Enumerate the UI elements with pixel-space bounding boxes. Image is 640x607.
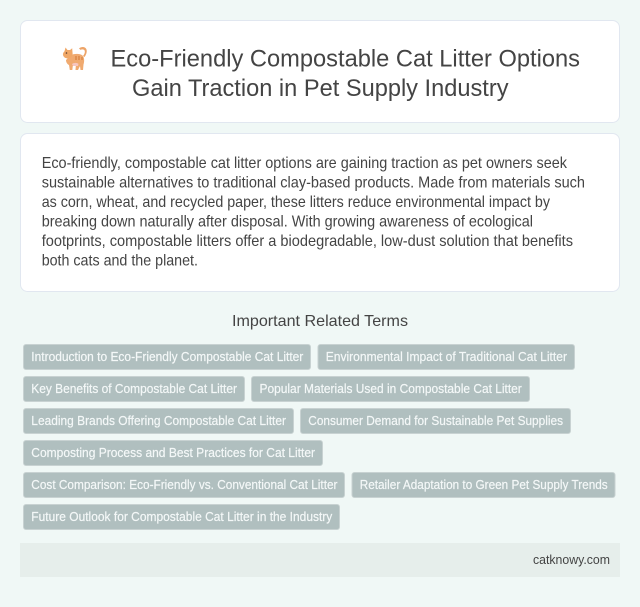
title text: Gain Traction in Pet Supply Industry [132, 75, 509, 102]
tag: future outlook: Future Outlook for Compostable Cat Litter in the Industry [31, 509, 333, 524]
tag: environmental impact [318, 344, 574, 370]
panel: summary paragraph: sustainable alternatives to traditional clay-based products. Made from materials such [42, 174, 585, 192]
tag: retailer adaptation: Retailer Adaptation to Green Pet Supply Trends [360, 477, 608, 492]
panel: summary paragraph [20, 134, 620, 292]
panel: summary paragraph: as corn, wheat, and recycled paper, these litters reduce environmental impact by [42, 194, 550, 211]
tag: introduction: Introduction to Eco-Friendly Compostable Cat Litter [31, 349, 304, 364]
tag: key benefits [24, 376, 244, 402]
tag: consumer demand [300, 408, 570, 434]
icon: cat [63, 47, 87, 70]
title text: Eco-Friendly Compostable Cat Litter Options [110, 46, 580, 72]
tag: popular materials: Popular Materials Used in Compostable Cat Litter [260, 381, 522, 396]
panel: summary paragraph: both cats and the planet. [42, 252, 198, 270]
tag: leading brands [24, 408, 294, 434]
tag: composting process: Composting Process and Best Practices for Cat Litter [31, 445, 316, 460]
tag: popular materials [252, 376, 530, 402]
tag: environmental impact: Environmental Impact of Traditional Cat Litter [326, 349, 568, 364]
tag: introduction [24, 344, 310, 370]
footer: catknowy.com [533, 552, 610, 567]
tag: future outlook [24, 504, 340, 530]
tag: cost comparison: Cost Comparison: Eco-Friendly vs. Conventional Cat Litter [31, 477, 338, 492]
tag: key benefits: Key Benefits of Compostable Cat Litter [31, 381, 238, 396]
panel: summary paragraph: footprints, compostable litters offer a biodegradable, low-dust solution that benefits [42, 233, 573, 250]
title text [110, 46, 580, 102]
tag: retailer adaptation [352, 472, 615, 498]
tag: consumer demand: Consumer Demand for Sustainable Pet Supplies [308, 413, 563, 428]
panel: title card [20, 20, 620, 122]
footer [20, 543, 620, 577]
panel: summary paragraph: breaking down naturally after disposal. With growing awareness of ecological [42, 214, 533, 230]
panel: related term tags [24, 344, 615, 530]
tag: leading brands: Leading Brands Offering Compostable Cat Litter [31, 413, 287, 428]
heading: important related terms: Important Related Terms [232, 313, 408, 330]
tag: cost comparison [24, 472, 344, 498]
panel: summary paragraph: Eco-friendly, compostable cat litter options are gaining traction as pet owners seek [42, 155, 567, 172]
tag: composting process [24, 440, 322, 466]
